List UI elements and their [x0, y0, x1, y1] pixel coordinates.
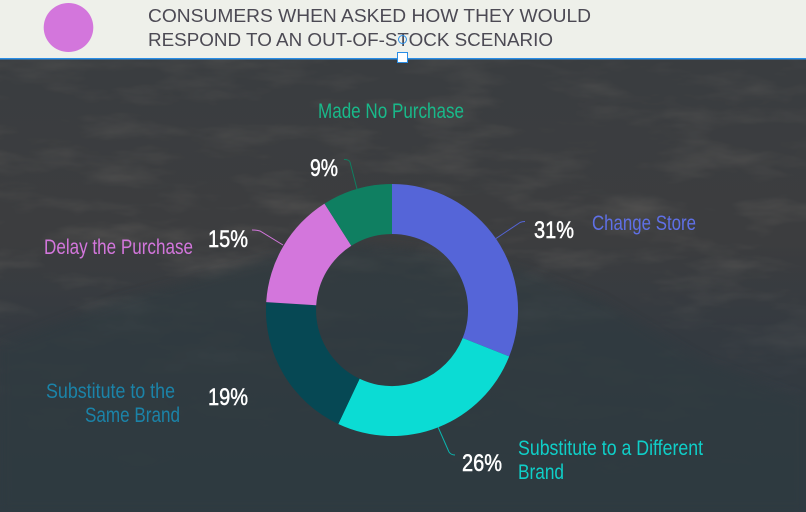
value: 9%: 9%: [310, 155, 338, 182]
dark mountain and cloud background: [0, 60, 806, 346]
icon: pink circle: [44, 3, 93, 52]
value: 19%: 19%: [208, 384, 248, 411]
value: 31%: 31%: [534, 217, 574, 244]
label: Change Store: Change Store: [592, 212, 696, 235]
title: CONSUMERS WHEN ASKED HOW THEY WOULD: [148, 5, 591, 26]
segment: Delay the Purchase 15%: [266, 204, 351, 305]
segment: Made No Purchase 9%: [324, 184, 392, 246]
leader line: 15%: [252, 230, 283, 245]
label: Substitute to a Different Brand: Substitute to a Different: [518, 437, 703, 460]
label: Substitute to the Same Brand: Same Brand: [85, 404, 180, 427]
value: 15%: 15%: [208, 226, 248, 253]
segment: Substitute to the Same Brand 19%: [266, 302, 360, 424]
label: Made No Purchase: Made No Purchase: [318, 100, 464, 123]
title: RESPOND TO AN OUT-OF-STOCK SCENARIO: [148, 29, 553, 50]
segment: Substitute to a Different Brand 26%: [338, 338, 509, 436]
label: Substitute to the Same Brand: Substitute to the: [46, 380, 175, 403]
header band: [0, 0, 806, 62]
selection handles: [398, 36, 408, 62]
leader line: 31%: [496, 222, 525, 238]
leader line: 9%: [344, 160, 357, 189]
value: 26%: 26%: [462, 450, 502, 477]
donut chart: [266, 184, 518, 436]
label: Substitute to a Different Brand: Brand: [518, 461, 564, 484]
segment: Change Store 31%: [392, 184, 518, 356]
label: Delay the Purchase: Delay the Purchase: [44, 236, 193, 259]
leader line: 26%: [438, 427, 455, 455]
